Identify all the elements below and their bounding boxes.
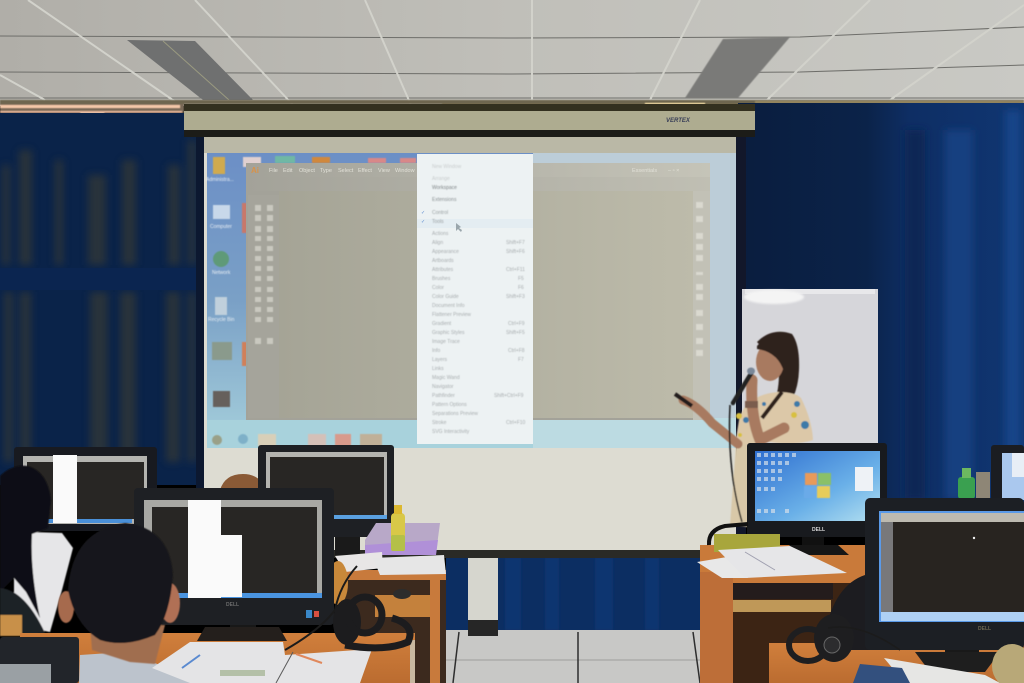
window menu dropdown: Magic Wand xyxy=(432,375,460,381)
application menu bar: Object xyxy=(299,168,315,174)
application menu bar: Type xyxy=(320,168,332,174)
desktop icon labels: Computer xyxy=(210,224,232,230)
window menu dropdown: ✓ xyxy=(421,219,425,225)
right wood desk xyxy=(700,545,865,683)
large right monitor xyxy=(865,498,1024,672)
purple folder and papers xyxy=(335,523,446,575)
white pillar xyxy=(468,558,498,636)
student's head from behind xyxy=(58,523,180,664)
window menu dropdown: Links xyxy=(432,366,444,372)
window menu dropdown: Appearance xyxy=(432,249,459,255)
window menu dropdown: Flattener Preview xyxy=(432,312,471,318)
tools panel xyxy=(248,195,279,418)
window menu dropdown: Attributes xyxy=(432,267,454,273)
window menu dropdown: Arrange xyxy=(432,176,450,182)
application menu bar: Select xyxy=(338,168,354,174)
raised forearm and hand xyxy=(752,380,784,440)
valance box with brand xyxy=(184,104,755,137)
hair back xyxy=(757,332,799,421)
window menu dropdown: Ctrl+F11 xyxy=(506,267,525,273)
woman at left xyxy=(0,466,73,636)
dell monitor: DELL xyxy=(812,527,825,533)
handouts front xyxy=(152,642,372,683)
application menu bar: File xyxy=(269,168,278,174)
mic cable coil and folder xyxy=(709,524,780,552)
window menu dropdown: F6 xyxy=(518,285,524,291)
window menu dropdown: Separations Preview xyxy=(432,411,478,417)
face xyxy=(756,343,784,381)
windows logo xyxy=(804,473,831,498)
large right monitor: DELL xyxy=(978,626,991,632)
student's shirt xyxy=(79,652,200,683)
application menu bar: Edit xyxy=(283,168,293,174)
window menu dropdown: Info xyxy=(432,348,441,354)
ceiling vent left xyxy=(127,40,253,100)
watch xyxy=(745,401,758,408)
window menu dropdown: Ctrl+F8 xyxy=(508,348,525,354)
right edge monitor xyxy=(991,445,1024,500)
desktop icon labels: Recycle Bin xyxy=(208,317,235,323)
center wood desk xyxy=(340,570,446,683)
window menu dropdown: Stroke xyxy=(432,420,447,426)
window menu dropdown: Gradient xyxy=(432,321,452,327)
blouse xyxy=(735,392,813,445)
right panel icons xyxy=(696,202,703,356)
right curtain xyxy=(738,103,1024,503)
window menu dropdown: ✓ xyxy=(421,210,425,216)
handouts on right desk xyxy=(697,546,847,578)
left back monitor xyxy=(14,447,157,531)
headphones on center desk xyxy=(285,566,410,650)
window menu dropdown: Color Guide xyxy=(432,294,459,300)
microphone xyxy=(733,372,752,403)
window menu dropdown: Ctrl+F10 xyxy=(506,420,526,426)
ceiling vent right xyxy=(685,37,790,98)
green bottle and cup xyxy=(958,468,990,499)
window menu dropdown: Navigator xyxy=(432,384,454,390)
window menu dropdown: Document Info xyxy=(432,303,465,309)
application menu bar: Window xyxy=(395,168,415,174)
window menu dropdown: Color xyxy=(432,285,444,291)
headphones right xyxy=(789,614,900,662)
yellow bottle xyxy=(391,505,405,551)
whiteboard xyxy=(742,289,878,447)
ceiling light strip xyxy=(0,100,1024,123)
mic cable xyxy=(730,405,742,522)
presenter xyxy=(675,332,813,530)
application menu bar: Essentials xyxy=(632,168,657,174)
application menu bar: Ai xyxy=(251,166,259,175)
window menu dropdown: Tools xyxy=(432,219,444,225)
dell monitor xyxy=(747,443,887,555)
artboard canvas xyxy=(279,191,693,418)
window menu dropdown: Shift+F5 xyxy=(506,330,525,336)
orange bag behind monitor xyxy=(328,561,348,605)
application menu bar: View xyxy=(378,168,390,174)
curtain below screen xyxy=(446,555,702,630)
front center wood desk xyxy=(20,633,415,683)
hair strand xyxy=(762,392,782,418)
window menu dropdown: New Window xyxy=(432,164,462,170)
window menu dropdown: Shift+F6 xyxy=(506,249,525,255)
desktop icon labels: Network xyxy=(212,270,231,276)
desktop icons xyxy=(212,156,416,446)
window menu dropdown: Graphic Styles xyxy=(432,330,465,336)
clicker xyxy=(675,394,692,406)
window menu dropdown xyxy=(417,154,533,444)
window menu dropdown: Extensions xyxy=(432,197,457,203)
window menu dropdown: F5 xyxy=(518,276,524,282)
window menu dropdown: Image Trace xyxy=(432,339,460,345)
window menu dropdown: Brushes xyxy=(432,276,451,282)
window menu dropdown: Shift+Ctrl+F9 xyxy=(494,393,524,399)
window menu dropdown: F7 xyxy=(518,357,524,363)
window menu dropdown: Shift+F7 xyxy=(506,240,525,246)
application menu bar: Effect xyxy=(358,168,372,174)
projected desktop xyxy=(207,153,736,448)
chair back xyxy=(825,575,872,650)
window menu dropdown: Ctrl+F9 xyxy=(508,321,525,327)
application menu bar xyxy=(251,166,679,175)
papers lower right xyxy=(853,644,1024,683)
window menu dropdown: SVG Interactivity xyxy=(432,429,470,435)
large front monitor: DELL xyxy=(226,602,239,608)
window menu dropdown: Control xyxy=(432,210,448,216)
window menu dropdown: Align xyxy=(432,240,443,246)
projection screen xyxy=(196,137,746,558)
window menu dropdown: Workspace xyxy=(432,185,457,191)
lower right wood desk xyxy=(769,643,1024,683)
window menu dropdown: Artboards xyxy=(432,258,454,264)
left curtain xyxy=(0,113,206,485)
outstretched arm xyxy=(683,400,738,444)
desktop icon labels: Administra... xyxy=(206,177,234,183)
large front monitor xyxy=(134,488,334,641)
window menu dropdown: Pattern Options xyxy=(432,402,467,408)
window menu dropdown: Shift+F3 xyxy=(506,294,525,300)
screen bottom bar xyxy=(203,550,703,558)
mouse cursor xyxy=(456,223,462,232)
desktop icon labels xyxy=(206,177,235,323)
window menu dropdown: Actions xyxy=(432,231,449,237)
window menu dropdown: Pathfinder xyxy=(432,393,455,399)
dress skirt xyxy=(730,445,775,530)
floor xyxy=(440,630,705,683)
bottom-left monitor xyxy=(0,637,79,683)
window menu dropdown: Layers xyxy=(432,357,448,363)
back person's head xyxy=(220,474,266,490)
illustrator window xyxy=(246,163,710,420)
ceiling xyxy=(0,0,1024,106)
center monitor xyxy=(258,445,394,555)
valance box with brand: VERTEX xyxy=(666,118,691,124)
application menu bar: – ▫ × xyxy=(668,168,679,174)
